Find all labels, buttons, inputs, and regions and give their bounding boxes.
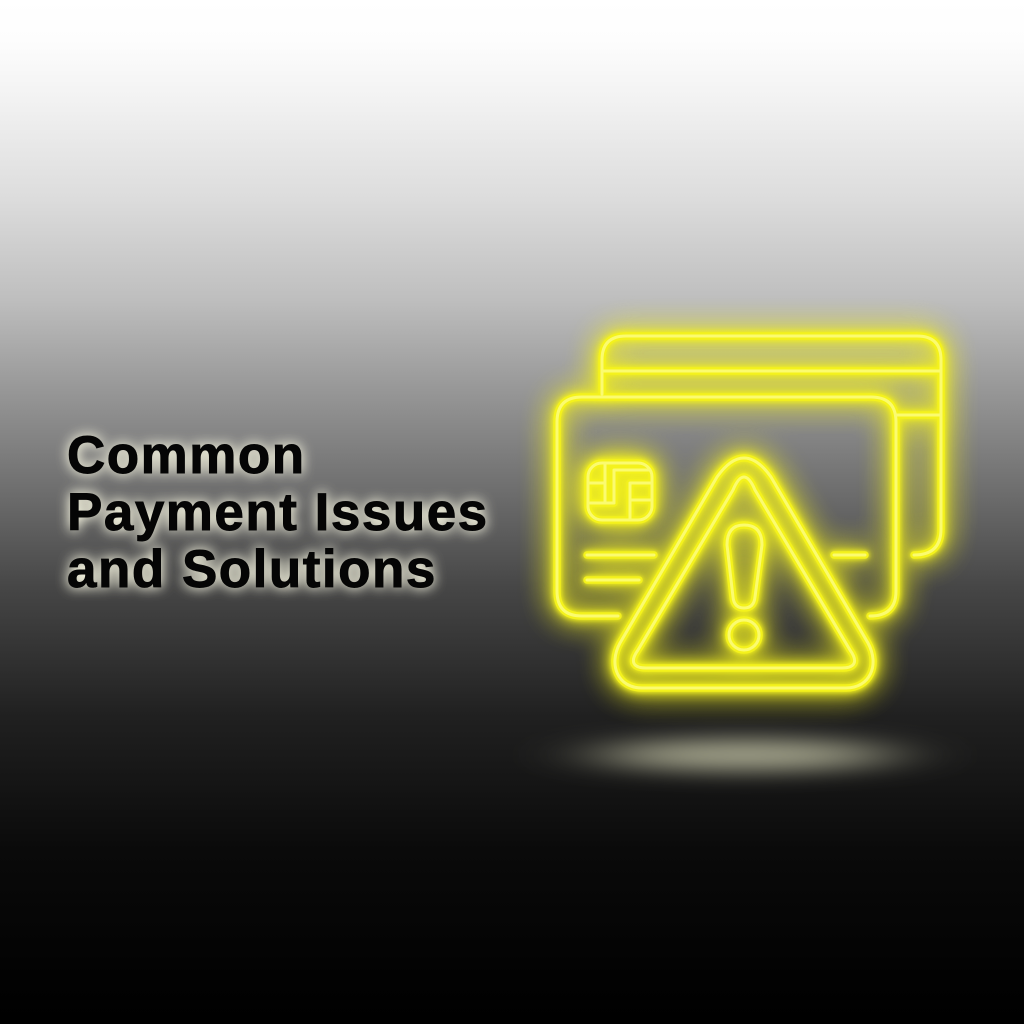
neon tube mid — [557, 336, 941, 688]
title: Common — [67, 426, 306, 485]
neon glow halo — [557, 336, 941, 688]
title — [67, 426, 489, 599]
icon: neon credit cards with warning triangle — [557, 336, 941, 688]
title: Payment Issues — [67, 483, 489, 542]
neon tube core — [557, 336, 941, 688]
title: and Solutions — [67, 540, 437, 599]
floor glow under icon — [595, 739, 895, 771]
